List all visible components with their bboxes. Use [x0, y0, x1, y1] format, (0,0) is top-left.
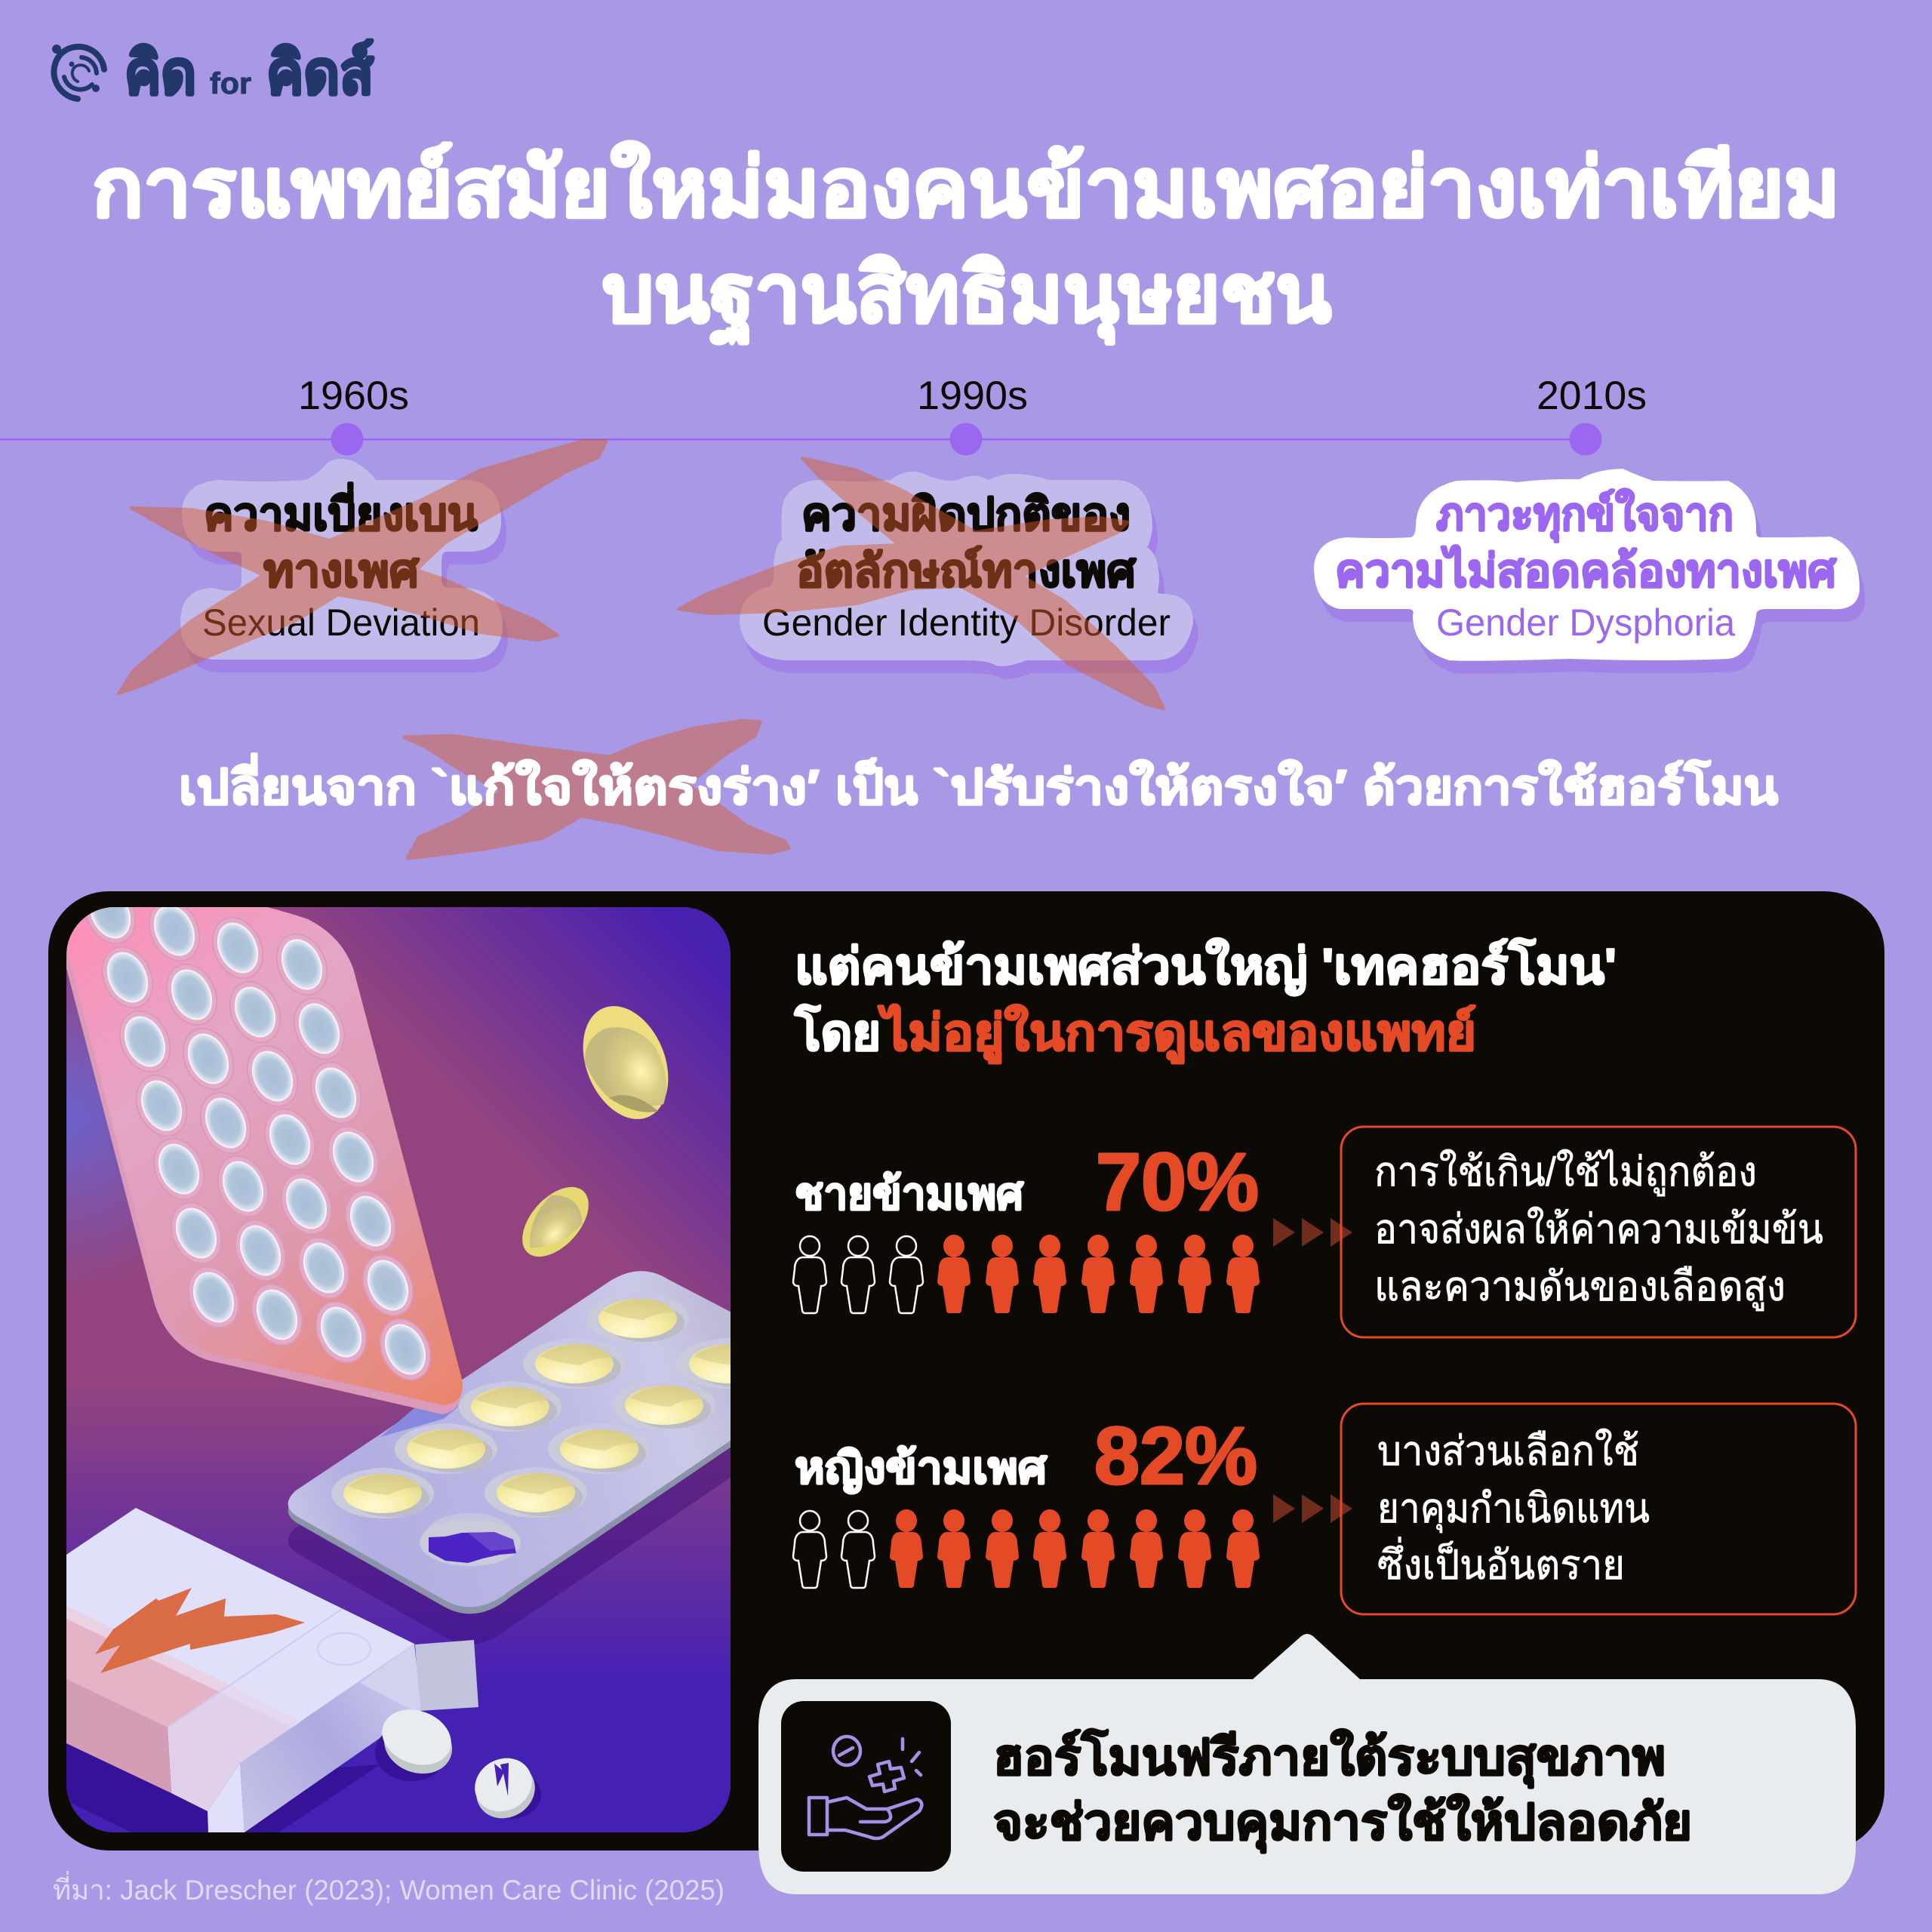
logo wordmark [125, 39, 374, 106]
1960s marker: 1960s [298, 374, 409, 418]
callout: free hormones [758, 1634, 1856, 1894]
silver blister pack [288, 1271, 780, 1644]
logo wordmark: for [210, 67, 251, 100]
card: Sexual Deviation: ทางเพศ [263, 546, 420, 596]
subtitle: เป็น [835, 758, 918, 814]
panel heading [794, 937, 1617, 1064]
small floating capsule [522, 1186, 589, 1257]
lightning mark [95, 1588, 305, 1673]
title [92, 142, 1840, 347]
card: Gender Dysphoria: ความไม่สอดคล้องทางเพศ [1335, 544, 1837, 596]
callout: free hormones: ฮอร์โมนฟรีภายใต้ระบบสุขภาพ [993, 1727, 1666, 1789]
people pictogram 70% [793, 1235, 1260, 1313]
card: Gender Identity Disorder [740, 472, 1198, 679]
panel heading: แต่คนข้ามเพศส่วนใหญ่ 'เทคฮอร์โมน' [795, 937, 1617, 995]
card: Gender Dysphoria: ภาวะทุกข์ใจจาก [1436, 488, 1734, 543]
cross behind subtitle [405, 721, 789, 858]
card: Sexual Deviation: ความเบี่ยงเบน [204, 482, 478, 540]
logo wordmark: คิดส์ [266, 39, 374, 106]
stat: trans men: ชายข้ามเพศ [795, 1170, 1024, 1219]
callout: birth control [1341, 1404, 1856, 1614]
illustration: pills [66, 907, 731, 1832]
card: Gender Identity Disorder: ความผิดปกติของ [801, 489, 1131, 540]
callout: free hormones: จะช่วยควบคุมการใช้ให้ปลอดภัย [993, 1792, 1692, 1854]
logo wordmark: คิด [125, 39, 196, 106]
callout: overuse: การใช้เกิน/ใช้ไม่ถูกต้อง [1374, 1149, 1757, 1196]
card: Gender Identity Disorder: อัตลักษณ์ทางเพศ [796, 546, 1137, 596]
icon: hand with hormone [781, 1701, 951, 1872]
panel heading: ไม่อยู่ในการดูแลของแพทย์ [878, 1003, 1476, 1064]
stat: trans women: 82% [1094, 1410, 1257, 1501]
people pictogram 82% [793, 1509, 1260, 1588]
callout: overuse: และความดันของเลือดสูง [1374, 1264, 1786, 1311]
icon: logo swirl [52, 45, 104, 99]
card: Gender Dysphoria [1314, 469, 1865, 674]
medicine box [66, 1508, 478, 1832]
broken tablet [475, 1758, 541, 1819]
1990s marker [917, 374, 1028, 456]
subtitle: ด้วยการใช้ฮอร์โมน [1363, 758, 1778, 814]
panel heading: โดย [794, 1003, 881, 1060]
title: การแพทย์สมัยใหม่มองคนข้ามเพศอย่างเท่าเทียม [92, 142, 1840, 233]
cross over Sexual Deviation [118, 441, 607, 694]
empty blister [420, 1513, 521, 1566]
subtitle [179, 753, 1778, 814]
logo [52, 39, 374, 106]
subtitle: `ปรับร่างให้ตรงใจ′ [933, 759, 1347, 814]
pink blister pack [63, 875, 463, 1414]
stat: trans men: 70% [1096, 1136, 1259, 1227]
callout: birth control: ซึ่งเป็นอันตราย [1377, 1537, 1625, 1588]
callout: birth control: บางส่วนเลือกใช้ [1377, 1428, 1639, 1474]
card: Gender Identity Disorder: Gender Identity Disorder [762, 601, 1171, 644]
large floating capsule [583, 1006, 669, 1119]
timeline [0, 374, 1647, 456]
card: Sexual Deviation [180, 459, 508, 672]
source: ที่มา: Jack Drescher (2023); Women Care Clinic (2025) [53, 1870, 724, 1906]
2010s marker: 2010s [1537, 374, 1647, 418]
arrows 82% [1273, 1494, 1352, 1523]
white tablet [375, 1709, 453, 1781]
stat: trans women: หญิงข้ามเพศ [795, 1444, 1048, 1494]
callout: overuse: อาจส่งผลให้ค่าความเข้มข้น [1374, 1206, 1823, 1252]
subtitle: เปลี่ยนจาก [179, 753, 417, 814]
arrows 70% [1273, 1218, 1352, 1247]
1960s marker [298, 374, 409, 456]
panel: black background [48, 891, 1884, 1850]
stat: trans women [793, 1410, 1260, 1588]
callout: birth control: ยาคุมกำเนิดแทน [1377, 1486, 1650, 1534]
cross over Gender Identity Disorder [678, 458, 1164, 709]
card: Sexual Deviation: Sexual Deviation [202, 601, 480, 644]
card: Gender Dysphoria: Gender Dysphoria [1436, 601, 1735, 644]
2010s marker [1537, 374, 1647, 456]
callout: overuse [1341, 1127, 1856, 1337]
subtitle: `แก้ใจให้ตรงร่าง′ [431, 759, 820, 814]
1990s marker: 1990s [917, 374, 1028, 418]
title: บนฐานสิทธิมนุษยชน [602, 248, 1331, 347]
stat: trans men [793, 1136, 1260, 1313]
